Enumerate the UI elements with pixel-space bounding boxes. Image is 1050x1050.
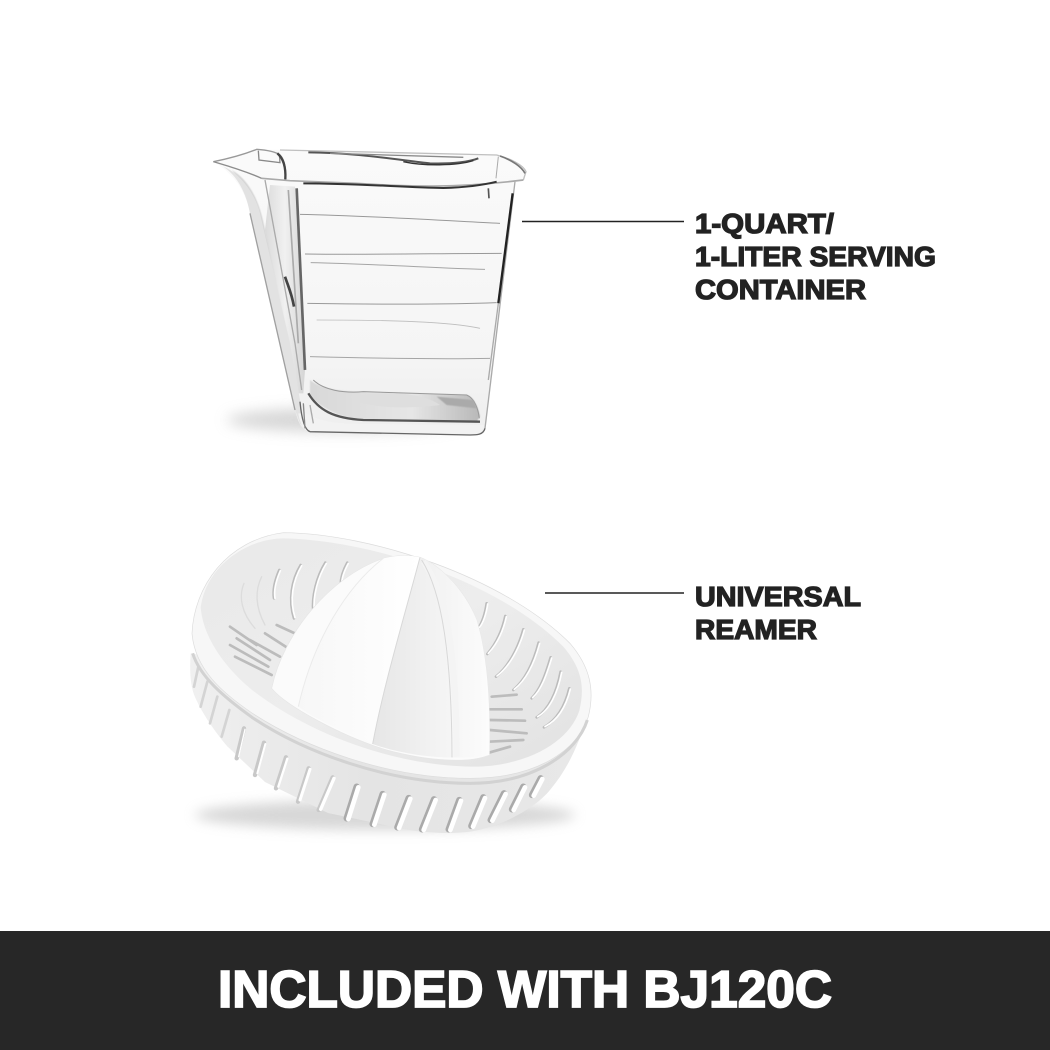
label: universal reamer: REAMER: [695, 614, 817, 645]
icon: 1-quart serving container: [213, 149, 526, 435]
reamer: [190, 533, 591, 833]
rim: [192, 533, 591, 778]
icon: universal reamer: [190, 533, 591, 833]
juicing cone: [272, 556, 490, 760]
bowl interior: [201, 538, 582, 767]
rim lower edge shadow: [193, 653, 587, 783]
callout: reamer leader line: [545, 592, 684, 594]
footer banner: [0, 931, 1050, 1050]
label: serving container: [695, 208, 936, 305]
slotted basket body: [190, 653, 587, 833]
callout: serving container leader line: [522, 220, 684, 222]
banner heading: INCLUDED WITH BJ120C: [218, 961, 832, 1019]
label: serving container: 1-LITER SERVING: [695, 241, 936, 272]
strainer slots: [230, 563, 570, 753]
label: serving container: 1-QUART/: [695, 208, 834, 239]
container shadow: [227, 408, 463, 432]
glass jug: [213, 149, 526, 435]
label: universal reamer: [695, 581, 861, 645]
reamer shadow: [195, 800, 575, 830]
label: universal reamer: UNIVERSAL: [695, 581, 861, 612]
label: serving container: CONTAINER: [695, 274, 866, 305]
